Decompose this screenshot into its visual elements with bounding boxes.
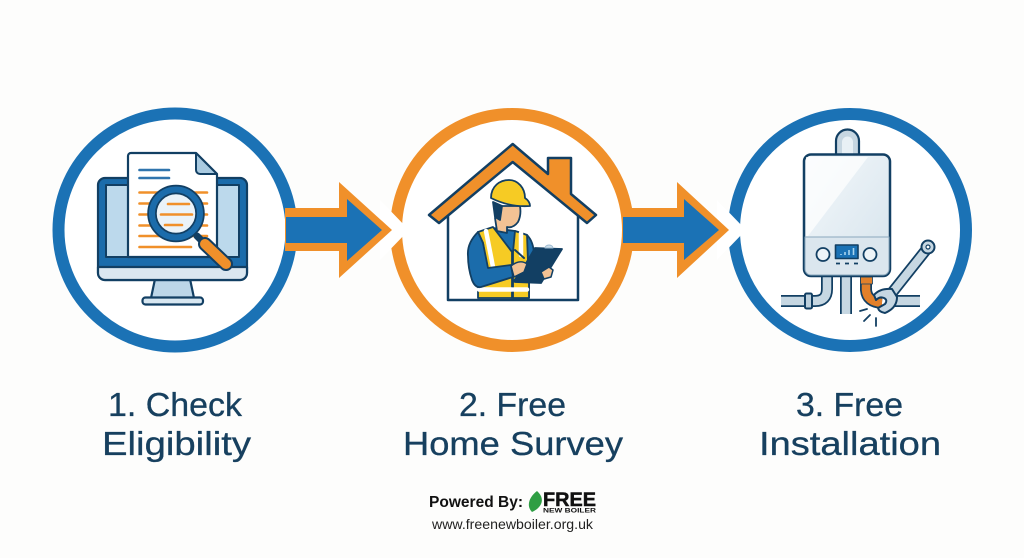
worker shirt and far arm — [493, 228, 534, 298]
worker — [468, 180, 562, 298]
pipes — [781, 276, 920, 314]
roof — [429, 144, 596, 223]
worker neck and face — [495, 206, 520, 233]
spark marks — [860, 309, 876, 326]
hard hat — [491, 180, 530, 206]
label: step 3: Installation — [759, 425, 941, 462]
logo wordmark: FREE — [543, 490, 596, 511]
high-vis vest — [478, 227, 529, 298]
monitor body — [98, 178, 247, 280]
step 2 circle ring — [396, 114, 628, 346]
hands and pencil — [515, 250, 524, 258]
footer branding — [429, 490, 596, 532]
clipboard — [515, 248, 562, 283]
label: step 3 — [759, 386, 941, 462]
monitor stand — [142, 279, 203, 304]
vest reflective stripes — [479, 231, 527, 290]
near arm — [468, 232, 513, 287]
label: step 1: Eligibility — [102, 425, 252, 462]
house walls — [448, 215, 578, 300]
arrow: step 2 to step 3 — [623, 182, 746, 278]
label: step 2: Home Survey — [403, 425, 624, 462]
logo wordmark: NEW BOILER — [543, 508, 596, 514]
icon: house with surveyor — [429, 144, 596, 300]
worker hair — [493, 202, 502, 220]
website url: www.freenewboiler.org.uk — [431, 516, 594, 532]
boiler gloss highlight — [806, 157, 868, 236]
step 1 circle ring — [58, 114, 292, 346]
label: step 1 — [102, 386, 252, 462]
boiler panel — [805, 237, 889, 275]
flue — [836, 130, 859, 155]
wrench — [874, 240, 934, 313]
document — [128, 153, 217, 257]
label: step 2 — [403, 386, 624, 462]
magnifier — [152, 190, 226, 264]
icon: green flame leaf — [529, 491, 542, 512]
powered by text: Powered By: — [429, 494, 523, 511]
label: step 3: 3. Free — [796, 386, 903, 423]
icon: monitor with document and magnifier — [98, 153, 247, 304]
label: step 2: 2. Free — [459, 386, 566, 423]
label: step 1: 1. Check — [108, 386, 243, 423]
step 3 circle ring — [734, 114, 966, 346]
step labels — [102, 386, 941, 462]
icon: boiler with pipes and wrench — [781, 130, 934, 326]
boiler body — [804, 154, 890, 276]
arrow: step 1 to step 2 — [285, 182, 409, 278]
